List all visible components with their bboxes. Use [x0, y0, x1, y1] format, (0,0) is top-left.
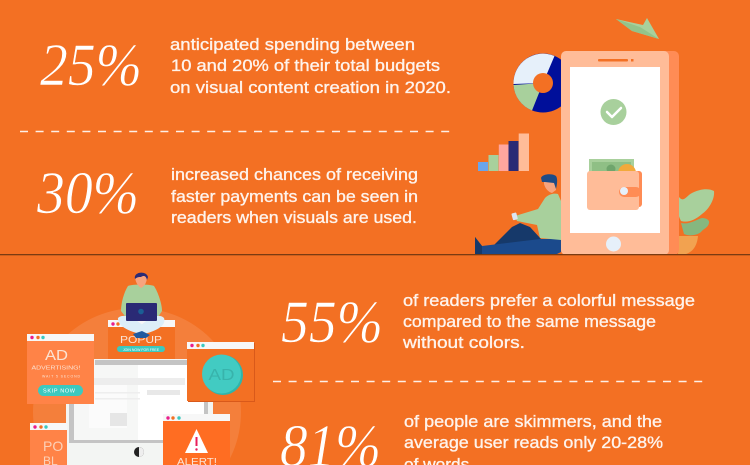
stat: 25%: 10 and 20% of their total budgets: [171, 56, 440, 75]
window: ad with skip button: ADVERTISING!: [32, 366, 81, 372]
window: ad with skip button: SKIP NOW: [43, 388, 76, 394]
window: ad with skip button: AD: [45, 347, 68, 364]
stat: 81%: [280, 412, 663, 465]
monitor: [66, 359, 213, 465]
person with laptop: [118, 273, 164, 338]
stat: 25%: anticipated spending between: [170, 35, 415, 54]
illustration: pop-up ads around a monitor: [27, 273, 255, 465]
window: pop blocker: PO: [43, 438, 63, 454]
window: round ad: [187, 342, 255, 402]
stat: 30%: readers when visuals are used.: [171, 208, 417, 227]
illustration: plant: [678, 189, 714, 254]
icon: wallet with cash: [587, 159, 642, 210]
baseline rule: [0, 254, 750, 255]
stat: 30%: faster payments can be seen in: [171, 187, 418, 206]
window: ad with skip button: WAIT 5 SECOND: [42, 374, 80, 378]
illustration: smartphone: [561, 51, 679, 255]
stat: 55%: compared to the same message: [403, 312, 656, 331]
window: ad with skip button: [27, 334, 94, 404]
stat: 25%: [40, 32, 451, 98]
stat: 81%: of people are skimmers, and the: [404, 412, 662, 431]
window: popup: JOIN NOW FOR FREE: [123, 348, 160, 352]
stat: 30%: increased chances of receiving: [171, 165, 418, 184]
window: pop blocker: [30, 423, 67, 465]
window: alert: [163, 414, 230, 465]
illustration: paper plane: [616, 18, 659, 39]
illustration: sitting person with phone: [475, 174, 561, 254]
stat: 30%: 30%: [36, 160, 139, 226]
stat: 55%: [281, 289, 695, 355]
stat: 55%: of readers prefer a colorful message: [403, 291, 695, 310]
stat: 25%: on visual content creation in 2020.: [170, 78, 451, 97]
stat: 81%: average user reads only 20-28%: [404, 433, 663, 452]
window: popup: POPUP: [120, 335, 162, 346]
icon: check mark: [600, 99, 626, 125]
stat: 30%: [36, 160, 418, 227]
stat: 55%: 55%: [281, 289, 383, 355]
icon: bar chart: [478, 134, 529, 171]
stat: 25%: 25%: [40, 32, 142, 98]
icon: donut chart: [513, 54, 572, 112]
window: popup: [108, 320, 175, 365]
window: round ad: AD: [208, 367, 234, 384]
stat: 55%: without colors.: [402, 333, 525, 352]
